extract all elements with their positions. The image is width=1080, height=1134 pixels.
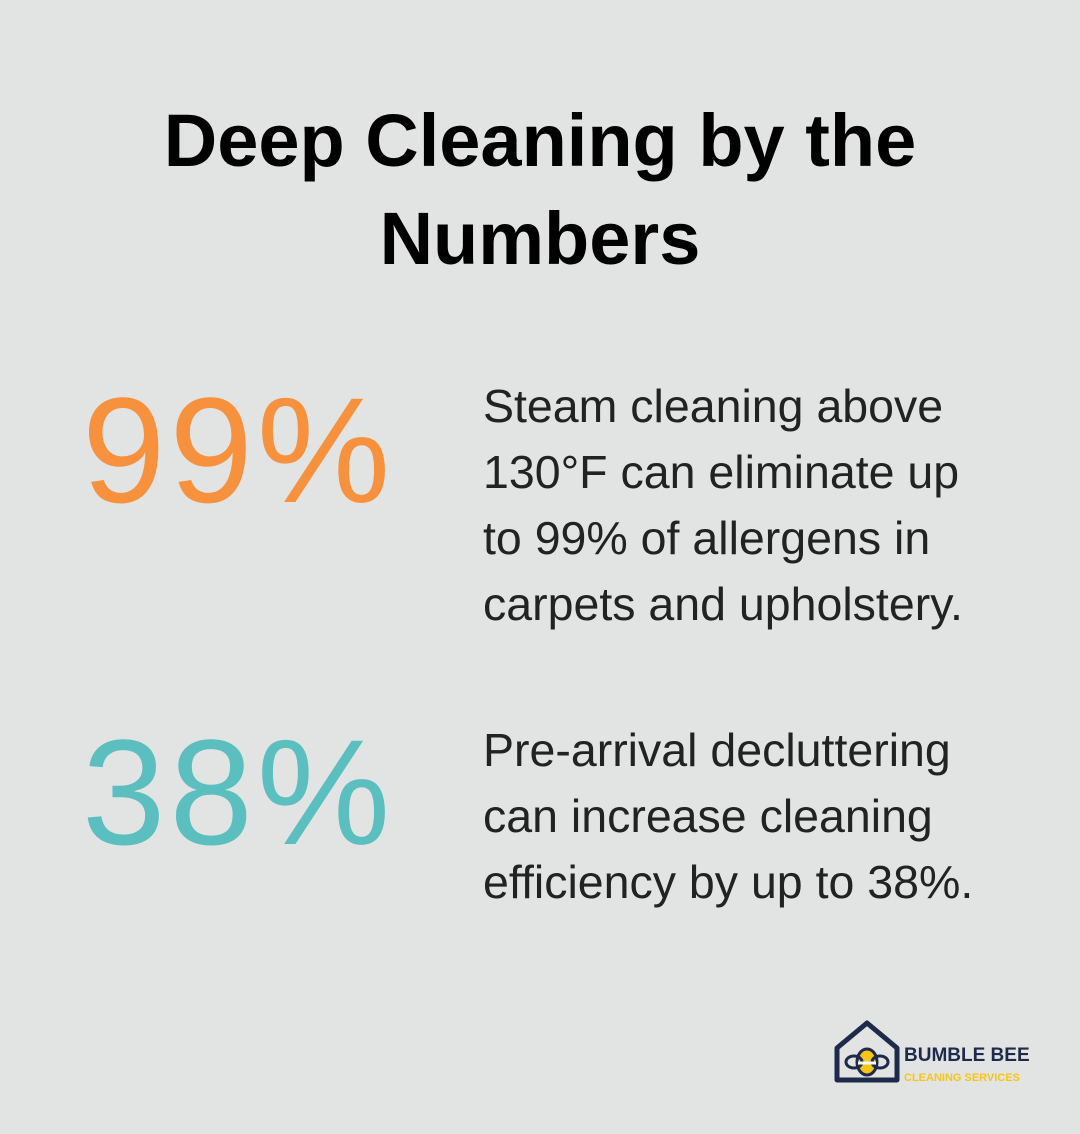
logo text: BUMBLE BEE [904, 1045, 1030, 1066]
title: Numbers [380, 197, 700, 280]
logo text [904, 1045, 1030, 1084]
icon: house with bee [834, 1020, 900, 1082]
title [164, 99, 916, 280]
text: steam cleaning [483, 380, 963, 630]
text: decluttering: efficiency by up to 38%. [483, 856, 973, 908]
text: steam cleaning: 130°F can eliminate up [483, 446, 959, 498]
logo text: CLEANING SERVICES [904, 1072, 1020, 1084]
stat: 99%: 99% [82, 366, 394, 534]
stat: 38%: 38% [82, 708, 394, 876]
text: steam cleaning: to 99% of allergens in [483, 512, 930, 564]
title: Deep Cleaning by the [164, 99, 916, 182]
logo [834, 1020, 1030, 1084]
text: steam cleaning: carpets and upholstery. [483, 578, 963, 630]
text: decluttering: Pre-arrival decluttering [483, 724, 951, 776]
text: decluttering: can increase cleaning [483, 790, 933, 842]
text: steam cleaning: Steam cleaning above [483, 380, 943, 432]
text: decluttering [483, 724, 973, 908]
